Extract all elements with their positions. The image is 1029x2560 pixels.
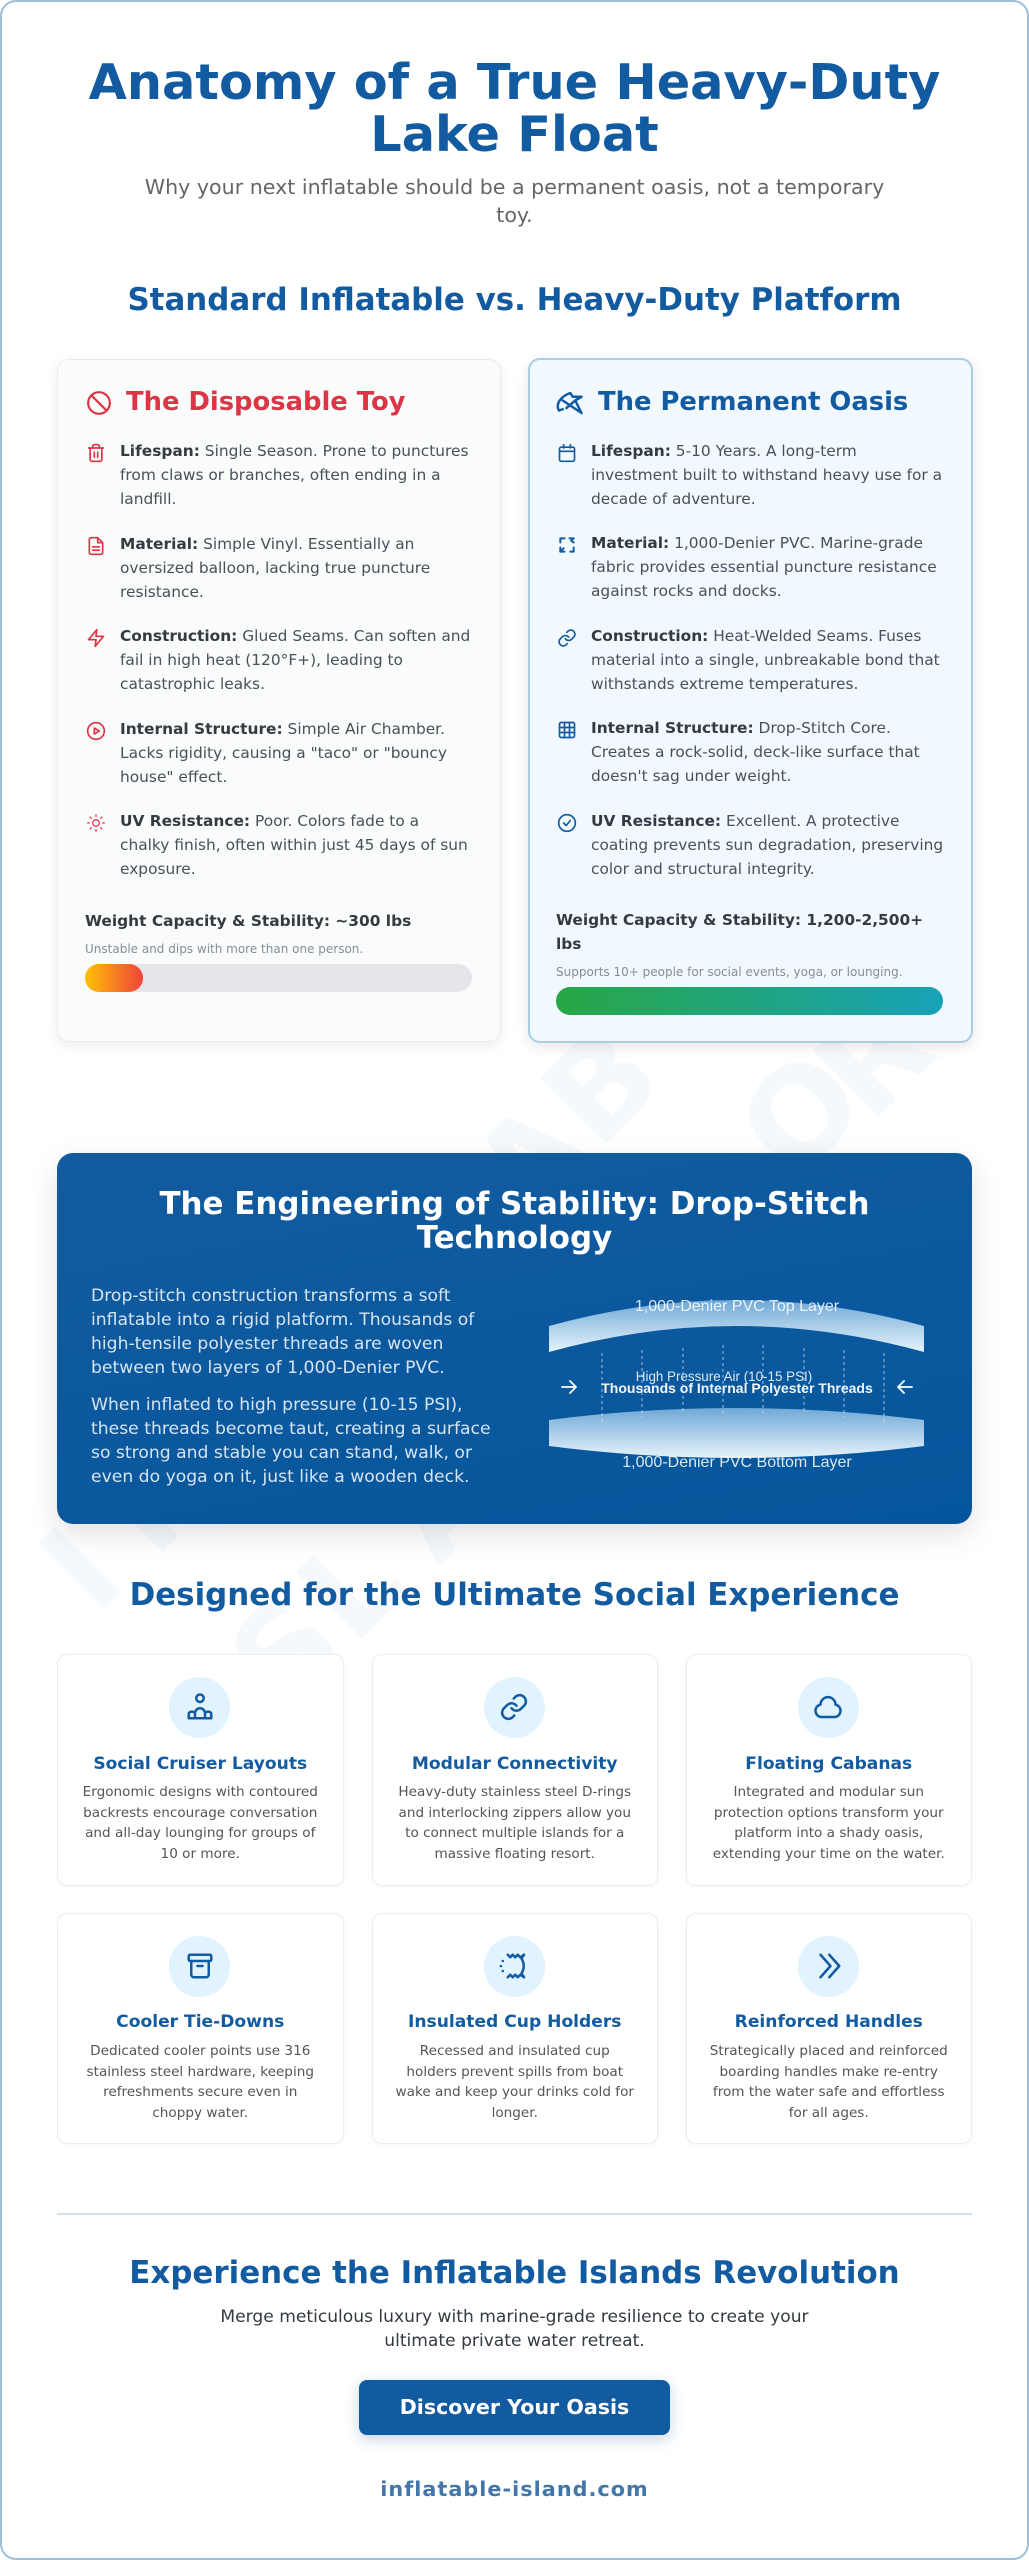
item: construction	[88, 627, 470, 693]
icon: check circle	[558, 814, 576, 832]
diagram labels: 1,000-Denier PVC Top Layer	[635, 1298, 840, 1315]
subtitle: toy.	[496, 203, 533, 227]
description	[58, 2041, 342, 2123]
text: material: Material: Simple Vinyl. Essentially an	[120, 535, 414, 553]
button: discover your oasis	[359, 2380, 670, 2435]
button: discover your oasis: Discover Your Oasis	[400, 2395, 629, 2419]
background watermark: A	[444, 1074, 619, 1249]
heading: engineering of stability: The Engineering of Stability: Drop-Stitch	[159, 1186, 870, 1222]
text: uv resistance: UV Resistance: Poor. Colors fade to a	[120, 812, 419, 830]
text: explanation: even do yoga on it, just like a wooden deck.	[91, 1466, 470, 1486]
top layer	[549, 1300, 924, 1352]
subtitle	[145, 175, 884, 227]
text: material	[591, 534, 937, 600]
description: longer.	[492, 2104, 538, 2120]
panel: the disposable toy	[57, 359, 501, 1042]
description: stainless steel hardware, keeping	[87, 2064, 314, 2080]
background watermark: R	[787, 971, 962, 1146]
label: weight capacity: lbs	[556, 935, 581, 953]
description: Integrated and modular sun	[733, 1784, 924, 1800]
text: explanation: When inflated to high pressure (10-15 PSI),	[91, 1394, 463, 1414]
description: refreshments secure even in	[103, 2084, 297, 2100]
item: internal structure	[86, 720, 447, 786]
icon: ban	[87, 391, 111, 415]
icon: cloud	[798, 1676, 858, 1738]
description: and interlocking zippers allow you	[398, 1804, 631, 1820]
text: lifespan: investment built to withstand heavy use for a	[591, 466, 942, 484]
description: extending your time on the water.	[713, 1846, 945, 1862]
text: construction	[591, 627, 940, 693]
title: Modular Connectivity	[412, 1754, 618, 1774]
description	[686, 2041, 971, 2123]
background watermark: O	[711, 1024, 893, 1206]
feature card: reinforced handles	[686, 1913, 972, 2144]
diagram: drop-stitch cross-section	[549, 1298, 924, 1471]
description: and all-day lounging for groups of	[85, 1825, 315, 1841]
description: 10 or more.	[161, 1846, 240, 1862]
item: lifespan	[88, 442, 469, 508]
panel: the permanent oasis	[528, 358, 973, 1043]
item: lifespan	[558, 442, 942, 508]
feature card: cooler tie-downs	[57, 1913, 344, 2144]
text: uv resistance: coating prevents sun degradation, preserving	[591, 836, 943, 854]
item: material	[559, 534, 937, 600]
title: Cooler Tie-Downs	[116, 2012, 284, 2032]
description: from the water safe and effortless	[713, 2084, 945, 2100]
text: material: against rocks and docks.	[591, 582, 782, 600]
text: lifespan	[591, 442, 942, 508]
description: protection options transform your	[714, 1804, 944, 1820]
gauge: 100 percent	[556, 987, 943, 1014]
website url: inflatable-island.com	[380, 2477, 649, 2501]
feature card: social cruiser layouts	[57, 1654, 344, 1886]
text: internal structure: Creates a rock-solid, deck-like surface that	[591, 743, 920, 761]
text: uv resistance: UV Resistance: Excellent. A protective	[591, 812, 900, 830]
text: explanation: between two layers of 1,000-Denier PVC.	[91, 1358, 445, 1378]
gauge: 15 percent	[85, 964, 472, 992]
description: massive floating resort.	[435, 1846, 595, 1862]
icon: circle play	[86, 722, 106, 740]
icon: calendar	[558, 444, 576, 462]
note: stability: Unstable and dips with more than one person.	[85, 942, 363, 956]
text: explanation: these threads become taut, creating a surface	[91, 1418, 491, 1438]
description: Strategically placed and reinforced	[710, 2043, 948, 2059]
text: uv resistance	[591, 812, 943, 878]
text: construction: Construction: Heat-Welded Seams. Fuses	[591, 627, 921, 645]
description	[686, 1782, 971, 1864]
text: construction: Construction: Glued Seams. Can soften and	[120, 627, 470, 645]
icon: archive box	[169, 1936, 230, 1996]
item: uv resistance	[558, 812, 943, 878]
text: lifespan: Lifespan: 5-10 Years. A long-term	[591, 442, 857, 460]
text: internal structure: Lacks rigidity, causing a "taco" or "bouncy	[120, 744, 447, 762]
text: construction: catastrophic leaks.	[120, 675, 265, 693]
description: Dedicated cooler points use 316	[90, 2043, 310, 2059]
section heading: call to action: Experience the Inflatable Islands Revolution	[129, 2255, 900, 2291]
bottom layer	[549, 1408, 924, 1458]
text: construction: withstands extreme temperatures.	[591, 675, 858, 693]
diagram labels: Thousands of Internal Polyester Threads	[601, 1380, 873, 1396]
icon: bolt	[88, 628, 104, 648]
text: uv resistance: exposure.	[120, 860, 196, 878]
heading: engineering of stability: Technology	[417, 1220, 612, 1256]
text: construction: fail in high heat (120°F+), leading to	[120, 651, 403, 669]
description	[398, 1784, 631, 1862]
text: internal structure	[120, 720, 447, 786]
text: explanation: so strong and stable you can stand, walk, or	[91, 1442, 472, 1462]
item: internal structure	[558, 719, 920, 785]
description: Recessed and insulated cup	[420, 2043, 610, 2059]
text: material	[120, 535, 430, 601]
description: Heavy-duty stainless steel D-rings	[398, 1784, 631, 1800]
text: material: Material: 1,000-Denier PVC. Marine-grade	[591, 534, 923, 552]
icon: person on seat	[169, 1676, 230, 1738]
text: internal structure: Internal Structure: Simple Air Chamber.	[120, 720, 445, 738]
description	[372, 2041, 657, 2123]
description: holders prevent spills from boat	[406, 2064, 623, 2080]
section heading: social experience: Designed for the Ultimate Social Experience	[130, 1577, 899, 1613]
icon: double chevron	[798, 1936, 858, 1996]
label: weight capacity: Weight Capacity & Stability: 1,200-2,500+	[556, 911, 923, 929]
text: uv resistance: color and structural integrity.	[591, 860, 815, 878]
description: choppy water.	[152, 2104, 248, 2120]
text: material: resistance.	[120, 583, 204, 601]
title: Insulated Cup Holders	[408, 2012, 621, 2032]
text: lifespan: Lifespan: Single Season. Prone to punctures	[120, 442, 469, 460]
icon: cup holder	[484, 1936, 544, 1996]
icon: link	[558, 629, 576, 647]
background watermark: B	[515, 1000, 689, 1174]
icon: document	[88, 536, 104, 556]
description: boarding handles make re-entry	[720, 2064, 938, 2080]
background watermark: A	[354, 1414, 529, 1589]
icon: sun	[87, 814, 105, 832]
background watermark: N	[71, 1401, 252, 1582]
title	[88, 53, 940, 163]
title: Floating Cabanas	[745, 1754, 912, 1774]
panel: drop-stitch technology	[57, 1153, 972, 1524]
heading: engineering of stability	[159, 1186, 870, 1256]
feature card: modular connectivity	[372, 1654, 658, 1886]
background watermark: S	[201, 1566, 372, 1737]
label: weight capacity	[556, 911, 923, 953]
text: lifespan: from claws or branches, often ending in a	[120, 466, 441, 484]
text: explanation: Drop-stitch construction transforms a soft	[91, 1286, 451, 1306]
text: construction: material into a single, unbreakable bond that	[591, 651, 940, 669]
description: to connect multiple islands for a	[405, 1825, 624, 1841]
description	[83, 1784, 318, 1862]
title: Reinforced Handles	[735, 2012, 923, 2032]
diagram labels: 1,000-Denier PVC Bottom Layer	[622, 1454, 852, 1471]
section heading: comparison: Standard Inflatable vs. Heavy-Duty Platform	[127, 282, 902, 318]
feature card: floating cabanas	[686, 1654, 972, 1886]
call to action text: Merge meticulous luxury with marine-grade resilience to create your	[220, 2307, 809, 2327]
description: for all ages.	[789, 2104, 869, 2120]
text: lifespan: decade of adventure.	[591, 490, 756, 508]
item: material	[88, 535, 430, 601]
polyester threads	[602, 1345, 884, 1422]
text: internal structure: doesn't sag under weight.	[591, 767, 791, 785]
description: backrests encourage conversation	[83, 1804, 317, 1820]
item: uv resistance	[87, 812, 468, 878]
text: explanation	[91, 1286, 491, 1486]
text: internal structure: house" effect.	[120, 768, 227, 786]
diagram labels	[601, 1298, 873, 1471]
arrows: pressure	[562, 1381, 912, 1393]
text: material: oversized balloon, lacking true puncture	[120, 559, 430, 577]
text: uv resistance	[120, 812, 468, 878]
text: lifespan: landfill.	[120, 490, 176, 508]
text: explanation: high-tensile polyester threads are woven	[91, 1334, 443, 1354]
diagram labels: High Pressure Air (10-15 PSI)	[636, 1369, 812, 1384]
description: wake and keep your drinks cold for	[396, 2084, 634, 2100]
icon: grid	[558, 722, 576, 738]
text: explanation: inflatable into a rigid platform. Thousands of	[91, 1310, 474, 1330]
icon: link	[484, 1676, 544, 1738]
text: internal structure: Internal Structure: Drop-Stitch Core.	[591, 719, 891, 737]
call to action text: ultimate private water retreat.	[384, 2331, 645, 2351]
heading: the disposable toy: The Disposable Toy	[126, 387, 406, 417]
text: internal structure	[591, 719, 920, 785]
description: Ergonomic designs with contoured	[83, 1784, 318, 1800]
text: construction	[120, 627, 470, 693]
text: uv resistance: chalky finish, often within just 45 days of sun	[120, 836, 468, 854]
icon: umbrella	[556, 392, 583, 414]
feature card: insulated cup holders	[372, 1913, 658, 2144]
text: lifespan	[120, 442, 469, 508]
heading: the permanent oasis: The Permanent Oasis	[598, 387, 908, 417]
background watermark: L	[270, 1505, 433, 1668]
note: stability: Supports 10+ people for social events, yoga, or lounging.	[556, 965, 903, 979]
title: Social Cruiser Layouts	[93, 1754, 307, 1774]
title: Anatomy of a True Heavy-Duty	[89, 53, 940, 111]
icon: expand arrows	[559, 537, 575, 553]
icon: trash	[88, 444, 104, 462]
background watermark: I	[12, 1500, 151, 1639]
text: material: fabric provides essential puncture resistance	[591, 558, 937, 576]
background watermark: O	[652, 828, 834, 1010]
label: weight capacity: Weight Capacity & Stability: ~300 lbs	[85, 912, 411, 930]
call to action text	[0, 2305, 1029, 2353]
title: Lake Float	[370, 105, 659, 163]
description: platform into a shady oasis,	[734, 1825, 923, 1841]
item: construction	[558, 627, 940, 693]
subtitle: Why your next inflatable should be a permanent oasis, not a temporary	[145, 175, 884, 199]
